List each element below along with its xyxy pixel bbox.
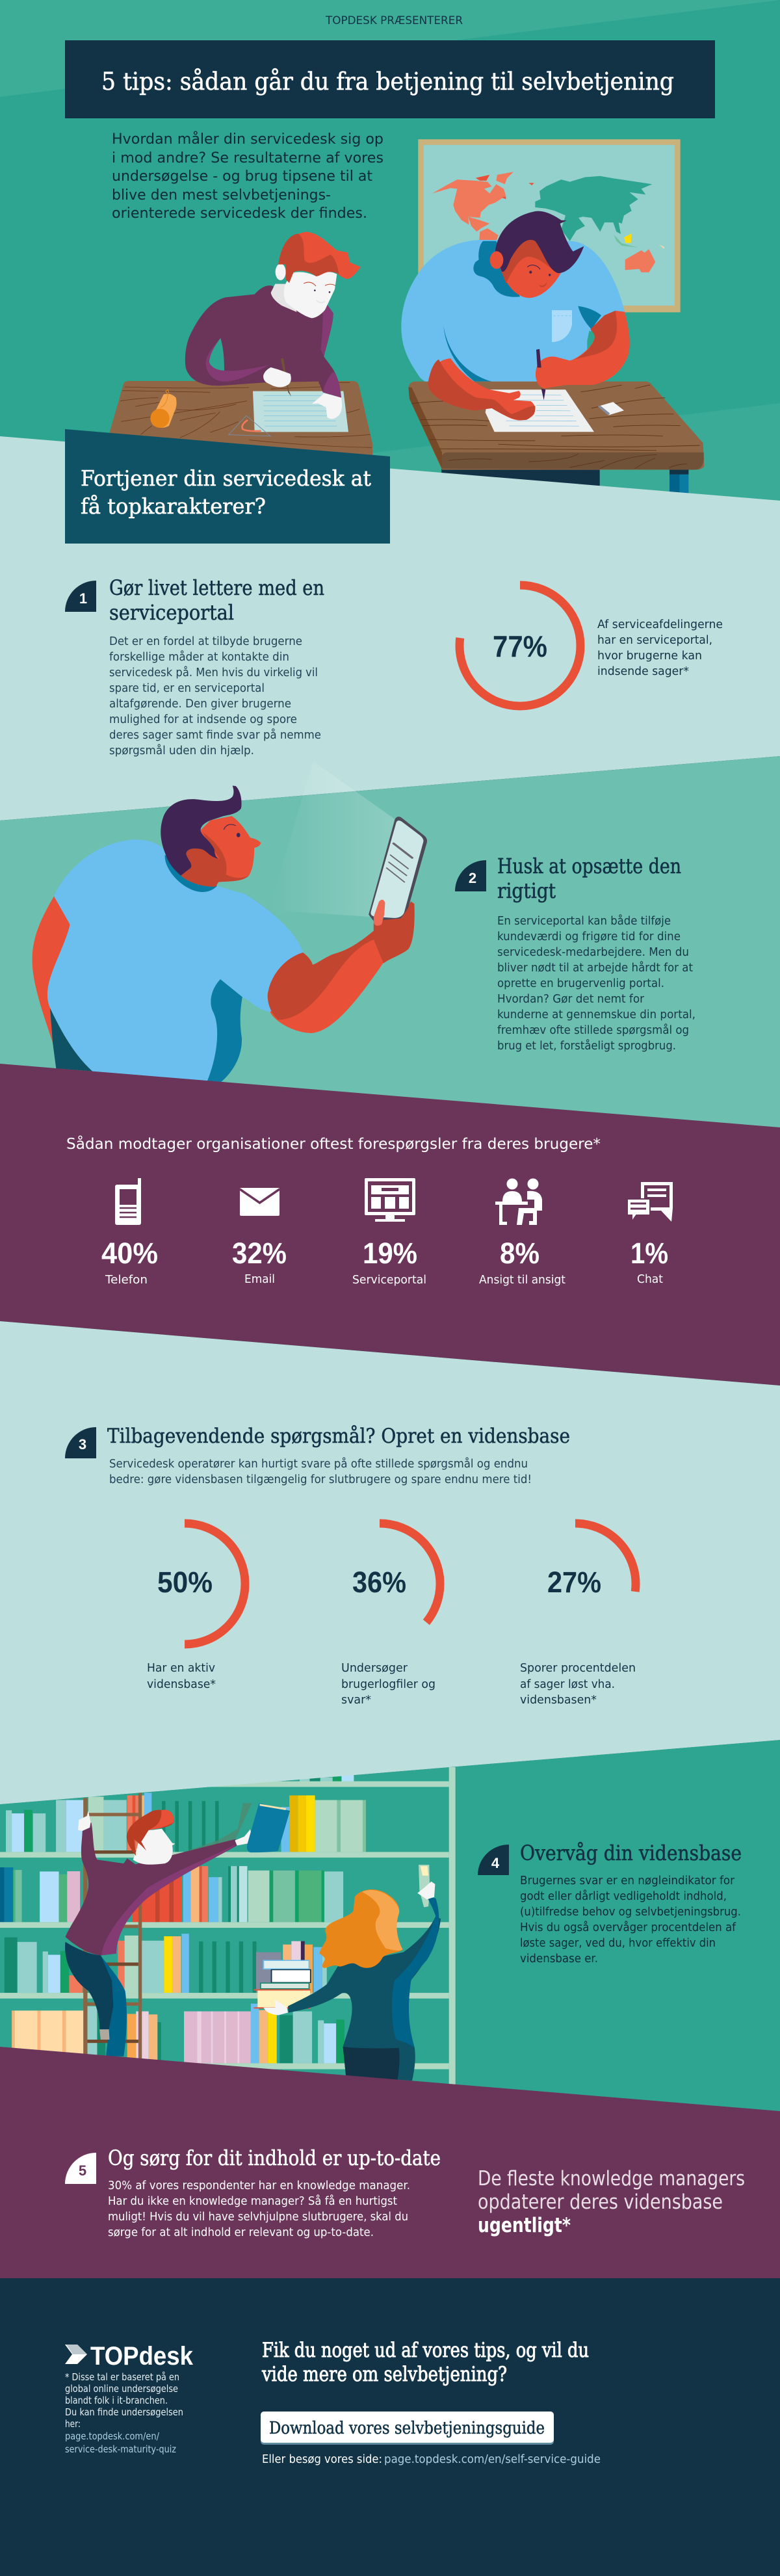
chart: 50% ring bbox=[124, 1523, 245, 1644]
heading: call to action bbox=[261, 2339, 589, 2386]
character: man in blue shirt bbox=[401, 211, 625, 384]
stat: 32% email: Email bbox=[244, 1272, 275, 1286]
callout: subheading box: få topkarakterer? bbox=[81, 493, 266, 519]
light beam from tablet bbox=[269, 761, 395, 917]
stat: 8% ansigt til ansigt: 8% bbox=[500, 1237, 540, 1270]
text: 27% label: vidensbasen* bbox=[520, 1694, 597, 1707]
text: tip 2 body: kunderne at gennemskue din portal, bbox=[497, 1008, 696, 1021]
icon: monitor bbox=[365, 1178, 415, 1222]
text: tip 2 body: kundeværdi og frigøre tid for dine bbox=[497, 930, 681, 943]
text: tip 4 body bbox=[520, 1874, 741, 1965]
icon: badge 1 bbox=[65, 581, 96, 612]
stat: 19% serviceportal: Serviceportal bbox=[352, 1273, 426, 1287]
character: man reaching for book bbox=[65, 1803, 262, 2057]
text: tip 1 body: spørgsmål uden din hjælp. bbox=[109, 744, 254, 757]
text: 50% label: Har en aktiv bbox=[147, 1662, 215, 1675]
icon: chat bubbles bbox=[627, 1182, 673, 1222]
text: tip 1 body: forskellige måder at kontakte din bbox=[109, 650, 289, 664]
heading: tip 2: Husk at opsætte den bbox=[497, 854, 681, 878]
panel: hero background bbox=[0, 0, 780, 520]
text: 27% label: Sporer procentdelen bbox=[520, 1662, 636, 1675]
text: tip 5 body: sørge for at alt indhold er relevant og up-to-date. bbox=[108, 2226, 374, 2239]
chart: 27% ring: 27% bbox=[547, 1566, 601, 1599]
intro text: undersøgelse - og brug tipsene til at bbox=[112, 168, 372, 185]
chart: 36% ring: 36% bbox=[352, 1566, 406, 1599]
icon: badge 3 bbox=[65, 1427, 96, 1458]
text: tip 2 body: fremhæv ofte stillede spørgsmål og bbox=[497, 1023, 689, 1037]
text: 50% label: vidensbase* bbox=[147, 1678, 216, 1691]
chart: 27% ring bbox=[515, 1523, 636, 1644]
stat: 40% telefon bbox=[101, 1237, 158, 1287]
text: survey footnote: * Disse tal er baseret på en bbox=[65, 2371, 179, 2383]
text: tip 2 body: bliver nødt til at arbejde hårdt for at bbox=[497, 961, 693, 975]
text: website link: Eller besøg vores side: bbox=[262, 2452, 382, 2466]
illustration: student with map and desk on the right bbox=[401, 139, 704, 494]
character: woman with books bbox=[254, 1865, 441, 2081]
text: tip 4 body: (u)tilfredse behov og selvbetjeningsbrug. bbox=[520, 1906, 741, 1919]
heading: call to action: Fik du noget ud af vores tips, og vil du bbox=[262, 2339, 589, 2362]
text: survey footnote: page.topdesk.com/en/ bbox=[65, 2430, 160, 2442]
callout: subheading box bbox=[65, 429, 390, 544]
text: tip 5 body: muligt! Hvis du vil have selvhjulpne slutbrugere, skal du bbox=[108, 2211, 408, 2224]
title banner: 5 tips: sådan går du fra betjening til selvbetjening bbox=[101, 68, 674, 96]
icon: phone bbox=[115, 1178, 141, 1225]
panel: tip 3 bbox=[0, 1321, 780, 1804]
text: tip 5 body: 30% af vores respondenter har en knowledge manager. bbox=[108, 2179, 410, 2192]
stat: 19% serviceportal bbox=[352, 1237, 426, 1287]
text: 77% label: indsende sager* bbox=[597, 665, 689, 678]
panel: tip 4 bbox=[478, 1841, 742, 1965]
text: tip 4 body: vidensbase er. bbox=[520, 1952, 598, 1965]
text: 27% label: af sager løst vha. bbox=[520, 1678, 615, 1691]
text: 77% label bbox=[597, 618, 723, 678]
icon: badge 2 bbox=[455, 860, 486, 891]
illustration: library scene bbox=[0, 1767, 456, 2086]
text: tip 1 body: deres sager samt finde svar på nemme bbox=[109, 728, 321, 742]
text: 50% label bbox=[147, 1662, 216, 1691]
pen and arms bbox=[428, 311, 630, 421]
illustration: student in purple sweater at desk bbox=[102, 232, 372, 460]
ladder bbox=[83, 1793, 142, 2060]
text: 27% label bbox=[520, 1662, 636, 1707]
heading: tip 2: rigtigt bbox=[497, 878, 556, 903]
chart: 36% ring bbox=[319, 1523, 440, 1644]
text: 77% label: Af serviceafdelingerne bbox=[597, 618, 723, 631]
heading: tip 1 bbox=[109, 575, 324, 625]
text: survey footnote bbox=[65, 2371, 183, 2455]
text: tip 3 body: bedre: gøre vidensbasen tilgængelig for slutbrugere og spare endnu mere tid! bbox=[109, 1473, 532, 1486]
text: tip 3 body bbox=[109, 1457, 532, 1486]
character: boy bbox=[185, 232, 361, 419]
icon: world map bbox=[418, 139, 681, 312]
icon: mail bbox=[240, 1188, 280, 1216]
text: 36% label bbox=[341, 1662, 436, 1707]
text: survey footnote: service-desk-maturity-quiz bbox=[65, 2443, 176, 2455]
text: tip 1 body: altafgørende. Den giver brugerne bbox=[109, 698, 291, 711]
text: 36% label: Undersøger bbox=[341, 1662, 408, 1675]
chart: 50% ring: 50% bbox=[157, 1566, 213, 1599]
icon: badge 2: 2 bbox=[469, 870, 476, 886]
icon: badge 5: 5 bbox=[79, 2162, 86, 2179]
panel: pale section one background bbox=[0, 436, 780, 821]
heading: statistics: Sådan modtager organisationer oftest forespørgsler fra deres brugere* bbox=[66, 1135, 601, 1153]
text: survey footnote: global online undersøgelse bbox=[65, 2383, 178, 2395]
arm holding tablet bbox=[268, 902, 415, 1033]
stat: 8% ansigt til ansigt: Ansigt til ansigt bbox=[479, 1273, 566, 1287]
chart: 77% ring: 77% bbox=[493, 629, 547, 663]
desk left bbox=[102, 381, 372, 460]
stat: 1% chat: 1% bbox=[630, 1237, 668, 1270]
stat: 19% serviceportal: 19% bbox=[363, 1237, 417, 1270]
text: tip 2 body: oprette en brugervenlig portal. bbox=[497, 977, 664, 990]
text: tip 4 body: Hvis du også overvåger procentdelen af bbox=[520, 1921, 736, 1934]
panel: teal section background bbox=[0, 756, 780, 1131]
text: tip 1 body: spare tid, er en serviceportal bbox=[109, 682, 265, 695]
heading: tip 5: Og sørg for dit indhold er up-to-date bbox=[108, 2146, 441, 2170]
heading: tip 3: Tilbagevendende spørgsmål? Opret en vidensbase bbox=[107, 1425, 570, 1448]
character: man bbox=[32, 785, 303, 1082]
text: tip 1 body: Det er en fordel at tilbyde brugerne bbox=[109, 635, 302, 648]
title banner bbox=[65, 40, 715, 118]
text: tip 4 body: Brugernes svar er en nøgleindikator for bbox=[520, 1874, 735, 1887]
intro text bbox=[112, 129, 384, 222]
text: survey footnote: her: bbox=[65, 2418, 81, 2430]
text: 36% label: brugerlogfiler og bbox=[341, 1678, 436, 1691]
stat: 32% email: 32% bbox=[232, 1237, 287, 1270]
pale overlay above library bbox=[0, 1729, 780, 1804]
panel: tip 5 purple band bbox=[0, 2047, 780, 2278]
icon: badge 1: 1 bbox=[79, 590, 87, 607]
button: download guide bbox=[261, 2412, 554, 2445]
stat: 40% telefon: Telefon bbox=[105, 1273, 148, 1287]
intro text: orienterede servicedesk der findes. bbox=[112, 205, 367, 222]
eyebrow text: TOPDESK PRÆSENTERER bbox=[325, 14, 463, 27]
text: tip 2 body: servicedesk-medarbejdere. Men du bbox=[497, 946, 689, 959]
text: tip 3 body: Servicedesk operatører kan hurtigt svare på ofte stillede spørgsmål og endnu bbox=[109, 1457, 528, 1471]
text: survey footnote: Du kan finde undersøgelsen bbox=[65, 2406, 183, 2418]
text: tip 1 body: servicedesk på. Men hvis du virkelig vil bbox=[109, 666, 318, 679]
intro text: Hvordan måler din servicedesk sig op bbox=[112, 129, 384, 148]
callout: weekly update bbox=[478, 2167, 745, 2237]
text: survey footnote: blandt folk i it-branchen. bbox=[65, 2395, 168, 2406]
callout: weekly update: opdaterer deres vidensbase bbox=[478, 2190, 723, 2214]
text: 77% label: hvor brugerne kan bbox=[597, 650, 702, 663]
stat: 40% telefon: 40% bbox=[101, 1237, 158, 1270]
panel: footer bbox=[0, 2278, 780, 2576]
text: tip 5 body bbox=[108, 2179, 410, 2239]
text: website link: page.topdesk.com/en/self-service-guide bbox=[384, 2452, 601, 2466]
intro text: i mod andre? Se resultaterne af vores bbox=[112, 150, 384, 166]
illustration: man with tablet bbox=[32, 761, 427, 1082]
text: tip 2 body: Hvordan? Gør det nemt for bbox=[497, 993, 645, 1006]
panel: tip 1 bbox=[65, 575, 723, 757]
panel: tip 2 bbox=[455, 854, 696, 1053]
icon: blue book bbox=[247, 1803, 290, 1852]
bookshelf with books bbox=[0, 1767, 456, 2086]
stat: 8% ansigt til ansigt bbox=[479, 1237, 566, 1287]
text: tip 5 body: Har du ikke en knowledge manager? Så få en hurtigst bbox=[108, 2194, 397, 2208]
icon: set square and eraser bbox=[229, 415, 270, 436]
stat: 1% chat bbox=[630, 1237, 668, 1286]
heading: tip 1: Gør livet lettere med en bbox=[109, 575, 324, 600]
paper bbox=[253, 391, 348, 432]
heading: tip 2 bbox=[497, 854, 681, 903]
desk right bbox=[408, 382, 704, 494]
panel: library background bbox=[0, 1740, 780, 2113]
text: tip 1 body: mulighed for at indsende og spore bbox=[109, 713, 297, 726]
panel: purple statistics band bbox=[0, 1064, 780, 1386]
icon: pencil case bbox=[150, 389, 177, 428]
button: download guide: Download vores selvbetjeningsguide bbox=[269, 2419, 545, 2438]
icon: two people at table bbox=[495, 1178, 542, 1225]
text: tip 1 body bbox=[109, 635, 321, 757]
heading: tip 1: serviceportal bbox=[109, 600, 234, 625]
text: tip 4 body: godt eller dårligt vedligeholdt indhold, bbox=[520, 1889, 727, 1903]
text: tip 2 body: En serviceportal kan både tilføje bbox=[497, 914, 671, 928]
text: tip 2 body: brug et let, forståeligt sprogbrug. bbox=[497, 1039, 676, 1053]
stat: 32% email bbox=[232, 1237, 287, 1286]
text: website link bbox=[262, 2452, 601, 2466]
chart: 77% ring bbox=[460, 585, 580, 706]
text: tip 2 body bbox=[497, 914, 696, 1053]
text: 36% label: svar* bbox=[341, 1694, 371, 1707]
icon: tablet bbox=[369, 817, 427, 926]
logo: TOPdesk: TOPdesk bbox=[90, 2342, 194, 2371]
text: tip 4 body: løste sager, ved du, hvor effektiv din bbox=[520, 1937, 716, 1950]
callout: weekly update: ugentligt* bbox=[478, 2214, 571, 2237]
callout: subheading box: Fortjener din servicedesk at bbox=[81, 466, 371, 491]
stat: 1% chat: Chat bbox=[637, 1272, 663, 1286]
icon: badge 3: 3 bbox=[79, 1436, 86, 1452]
icon: badge 4: 4 bbox=[491, 1855, 500, 1871]
text: 77% label: har en serviceportal, bbox=[597, 634, 712, 647]
intro text: blive den mest selvbetjenings- bbox=[112, 187, 331, 204]
icon: badge 5 bbox=[65, 2153, 96, 2184]
heading: call to action: vide mere om selvbetjening? bbox=[261, 2363, 507, 2386]
heading: tip 4: Overvåg din vidensbase bbox=[520, 1841, 742, 1865]
icon: badge 4 bbox=[478, 1845, 509, 1875]
